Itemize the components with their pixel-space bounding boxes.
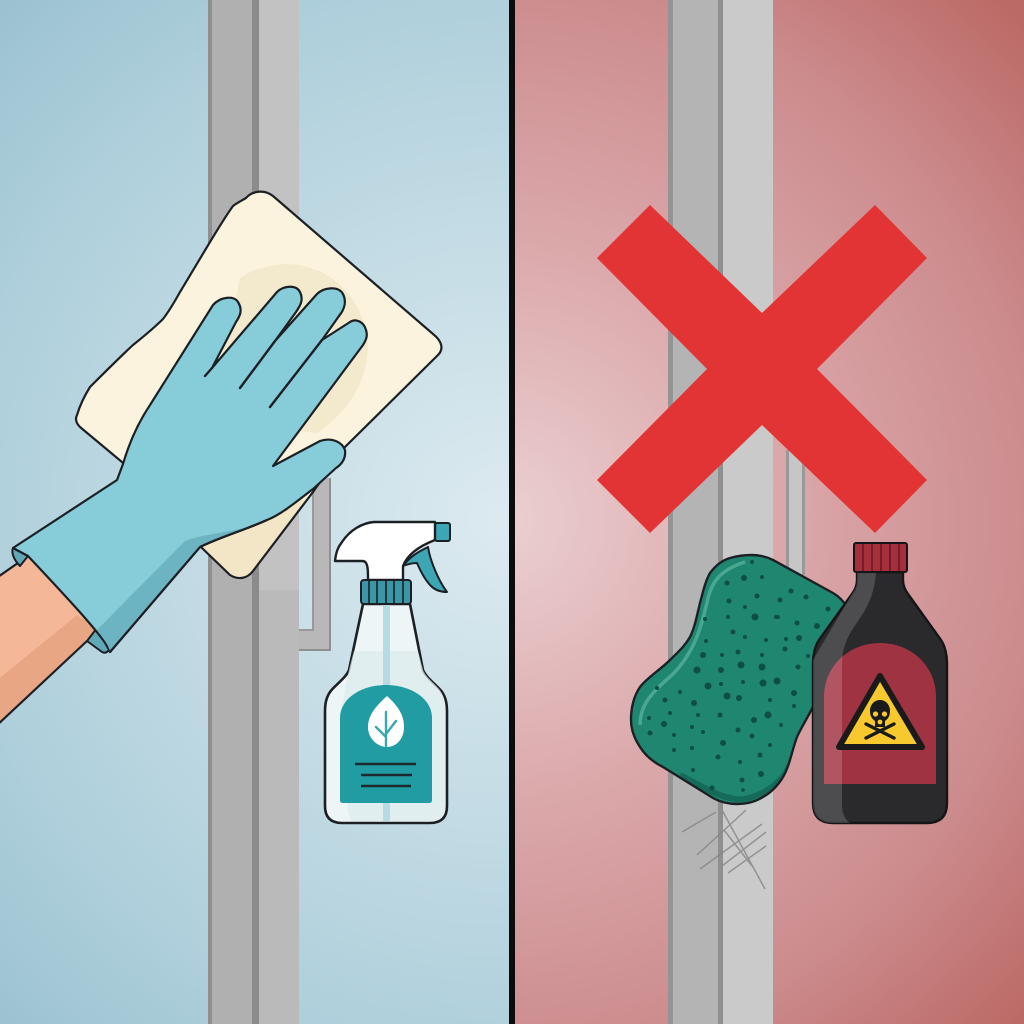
rubber glove: [12, 287, 367, 653]
glass highlight: [813, 572, 876, 823]
dark bottle body: [813, 572, 947, 823]
right window frame: [668, 0, 805, 1024]
toxic chemical bottle: [813, 543, 947, 823]
cloth lower fold: [202, 500, 306, 577]
icon: hazard triangle with skull: [839, 676, 922, 747]
red X mark: [597, 205, 927, 533]
cleaning cloth: [76, 192, 441, 590]
sprayer trigger: [403, 547, 447, 592]
spray bottle body: [325, 604, 447, 823]
sprayer nozzle: [435, 523, 450, 541]
glove shadow: [97, 522, 262, 651]
finger separations: [205, 340, 322, 407]
cuff opening: [12, 548, 109, 653]
dip tube: [383, 605, 390, 821]
skull: [866, 700, 894, 738]
arm: [0, 556, 97, 727]
scratches on the frame: [682, 810, 766, 889]
label text lines: [355, 764, 416, 786]
left window frame: [208, 0, 330, 1024]
sponge pores: [647, 560, 830, 792]
abrasive green sponge: [631, 555, 860, 804]
damp patch on cloth: [200, 264, 368, 433]
liquid fill: [342, 651, 445, 821]
icon: leaf: [368, 696, 404, 747]
red cap: [854, 543, 907, 572]
label: [824, 643, 936, 784]
spray bottle: [325, 522, 450, 823]
panel: correct method background: [0, 0, 510, 1024]
label with leaf: [340, 685, 432, 803]
bottle collar: [361, 580, 411, 604]
center divider: [509, 0, 515, 1024]
sprayer head: [335, 522, 435, 580]
panel: incorrect method background: [514, 0, 1024, 1024]
